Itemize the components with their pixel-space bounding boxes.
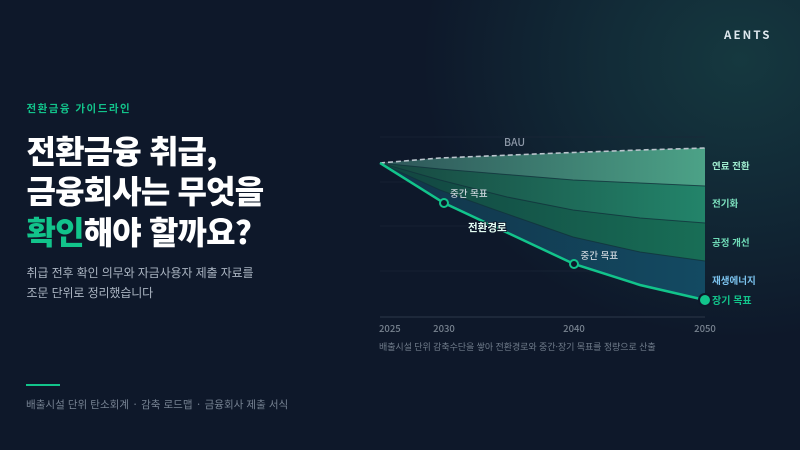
- accent rule: [26, 384, 60, 386]
- eyebrow label: 전환금융 가이드라인: [26, 101, 131, 116]
- label: BAU: BAU: [504, 135, 525, 150]
- subtitle: [26, 264, 253, 300]
- logo: AENTS: AENTS: [724, 27, 772, 43]
- x axis: 2025: [379, 321, 401, 335]
- band labels: 공정 개선: [712, 235, 750, 249]
- footer note: 배출시설 단위 탄소회계 · 감축 로드맵 · 금융회사 제출 서식: [26, 397, 288, 412]
- x axis: 2050: [694, 321, 716, 335]
- line: BAU dashed: [380, 148, 705, 163]
- subtitle: 취급 전후 확인 의무와 자금사용자 제출 자료를: [26, 264, 253, 281]
- x axis: 2030: [433, 321, 455, 335]
- title: [26, 127, 264, 254]
- subtitle: 조문 단위로 정리했습니다: [26, 284, 153, 300]
- marker: 2040 interim target: [570, 248, 618, 268]
- area: renewable energy band: [380, 163, 705, 300]
- band labels: [712, 158, 756, 287]
- marker: 2030 interim target: [440, 186, 488, 207]
- band labels: 연료 전환: [712, 158, 750, 172]
- x axis: [379, 317, 716, 335]
- label: transition pathway: 전환경로: [468, 220, 507, 235]
- title: 전환금융 취급,: [26, 127, 217, 173]
- marker: 2040 interim target: 중간 목표: [580, 248, 618, 262]
- area: electrification band: [380, 163, 705, 223]
- band labels: 재생에너지: [712, 273, 756, 287]
- chart caption: 배출시설 단위 감축수단을 쌓아 전환경로와 중간·장기 목표를 정량으로 산출: [379, 340, 656, 353]
- area: process improvement band: [380, 163, 705, 261]
- title: 금융회사는 무엇을: [26, 167, 263, 213]
- line: transition pathway: [380, 163, 705, 300]
- area: fuel switching band: [380, 148, 705, 186]
- band labels: 전기화: [712, 196, 738, 210]
- title: 확인해야 할까요?: [26, 208, 251, 254]
- x axis: 2040: [563, 321, 585, 335]
- marker: long-term target: 장기 목표: [712, 292, 752, 307]
- marker: 2030 interim target: 중간 목표: [450, 186, 488, 200]
